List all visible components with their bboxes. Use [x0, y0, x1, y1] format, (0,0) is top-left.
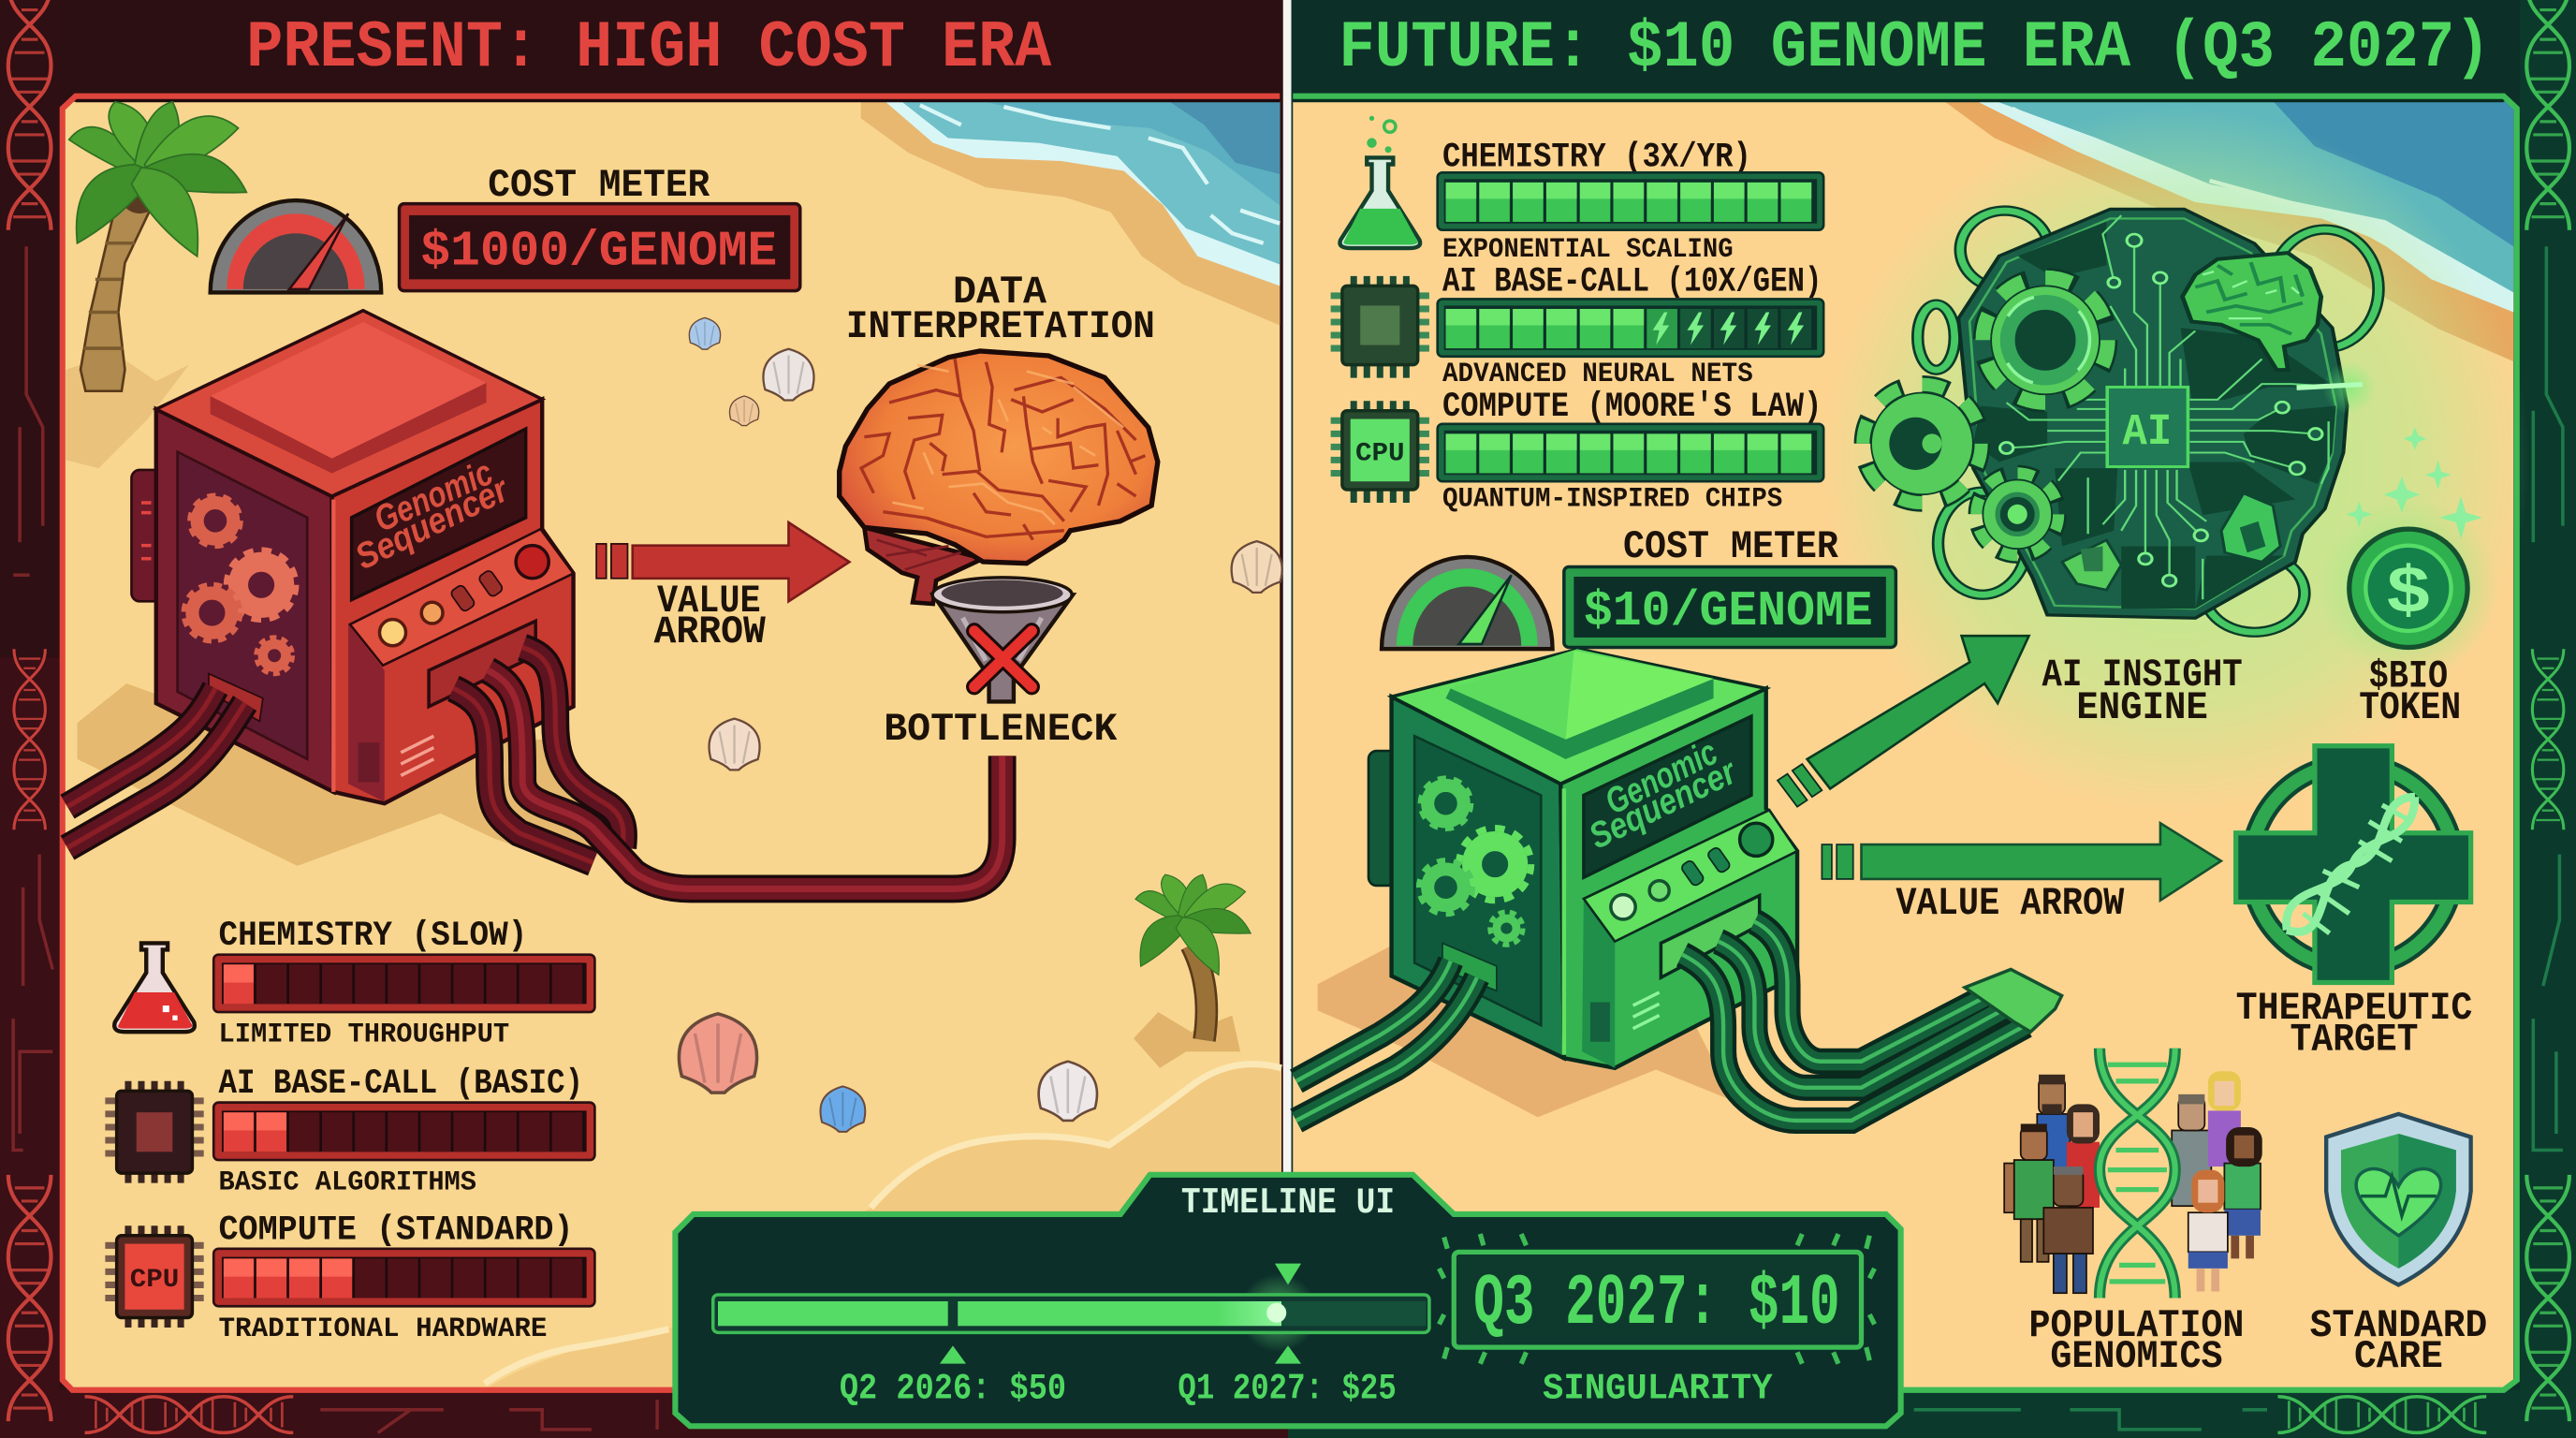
label: bottleneck: BOTTLENECK — [884, 707, 1118, 752]
callout: 10 dollar per genome — [1564, 566, 1895, 647]
icon: palm tree small — [1134, 874, 1251, 1068]
label: quantum-inspired chips: QUANTUM-INSPIRED CHIPS — [1442, 483, 1782, 515]
label: value arrow present: VALUE — [657, 579, 761, 624]
label: population genomics: POPULATION — [2029, 1303, 2244, 1348]
label: ai insight engine — [2042, 653, 2243, 730]
label: standard care: CARE — [2354, 1334, 2443, 1379]
label: singularity: SINGULARITY — [1543, 1369, 1774, 1410]
label: cost meter present: COST METER — [488, 163, 710, 208]
icon: green gauge — [1382, 557, 1553, 649]
bar: compute standard, 4 of 11 — [213, 1249, 594, 1306]
label: value arrow present: ARROW — [654, 609, 767, 654]
icon: green cpu chip — [1331, 401, 1429, 503]
label: exponential scaling: EXPONENTIAL SCALING — [1442, 233, 1734, 265]
callout: 1000 dollar per genome — [400, 204, 800, 291]
label: data interpretation: DATA — [953, 270, 1047, 315]
bar: chemistry slow, 1 of 11 — [213, 955, 594, 1012]
shadow: red sequencer — [78, 683, 624, 871]
chart: timeline progress track — [713, 1273, 1429, 1352]
icon: timeline markers — [940, 1264, 1301, 1364]
icon: brain — [840, 351, 1158, 604]
label: population genomics: GENOMICS — [2050, 1334, 2223, 1379]
icon: population genomics people and DNA — [2004, 1049, 2262, 1298]
icon: green flask with bubbles — [1339, 116, 1420, 248]
panel: timeline UI — [675, 1175, 1901, 1426]
callout: 10 dollar per genome: $10/GENOME — [1584, 583, 1873, 639]
label: compute moore's law: COMPUTE (MOORE'S LAW) — [1442, 388, 1822, 427]
label: therapeutic target — [2236, 986, 2472, 1062]
label: therapeutic target: TARGET — [2291, 1017, 2418, 1062]
icon: green genomic sequencer — [1368, 649, 1797, 1068]
bar: compute full — [1438, 424, 1823, 481]
panel: future beach scene — [1293, 102, 2530, 1390]
label: ai insight engine: AI INSIGHT — [2042, 653, 2243, 697]
icon: bottleneck funnel with red X — [932, 578, 1073, 701]
label: chemistry 3x: CHEMISTRY (3X/YR) — [1442, 138, 1751, 177]
icon: red flask — [114, 943, 195, 1032]
label: value arrow present — [654, 579, 767, 654]
shadow: green sequencer — [1318, 946, 1734, 1117]
label: compute standard: COMPUTE (STANDARD) — [218, 1211, 574, 1250]
panel: future progress bars — [1331, 116, 1823, 515]
callout: 1000 dollar per genome: $1000/GENOME — [420, 224, 777, 280]
icon: palm tree large — [66, 102, 246, 468]
label: traditional hardware: TRADITIONAL HARDWARE — [218, 1313, 547, 1344]
label: ai insight engine: ENGINE — [2076, 685, 2208, 730]
label: value arrow future: VALUE ARROW — [1895, 881, 2125, 926]
arrow: value arrow future — [1822, 823, 2221, 901]
label: data interpretation: INTERPRETATION — [846, 304, 1155, 349]
divider — [1283, 0, 1292, 1177]
label: q2 2026: Q2 2026: $50 — [840, 1369, 1066, 1410]
label: therapeutic target: THERAPEUTIC — [2236, 986, 2472, 1031]
icon: AI insight engine: AI — [2123, 408, 2172, 458]
label: population genomics — [2029, 1303, 2244, 1379]
icon: red cpu chip — [105, 1225, 204, 1328]
icon: sparkles — [2346, 427, 2482, 539]
icon: red genomic sequencer: Sequencer — [349, 469, 516, 578]
label: standard care — [2310, 1303, 2487, 1379]
icon: green cpu chip: CPU — [1355, 439, 1405, 468]
panel: left border decoration — [8, 0, 657, 1432]
label: standard care: STANDARD — [2310, 1303, 2487, 1348]
label: bio token: TOKEN — [2359, 685, 2461, 730]
icon: red cpu chip: CPU — [130, 1266, 179, 1295]
label: advanced neural nets: ADVANCED NEURAL NETS — [1442, 358, 1753, 389]
icon: AI insight engine — [1863, 209, 2378, 632]
arrow: diagonal arrow to AI engine — [1778, 636, 2029, 807]
bar: ai base-call with bolts — [1438, 299, 1823, 357]
label: ai base-call 10x: AI BASE-CALL (10X/GEN) — [1442, 263, 1822, 302]
icon: standard care shield — [2326, 1114, 2471, 1284]
label: ai base-call basic: AI BASE-CALL (BASIC) — [218, 1064, 583, 1104]
icon: BIO token coin — [2318, 498, 2498, 679]
label: limited throughput: LIMITED THROUGHPUT — [218, 1019, 509, 1050]
label: bio token: $BIO — [2369, 654, 2448, 699]
arrow: cables from red sequencer — [67, 647, 1003, 888]
icon: green cable connector — [1965, 969, 2062, 1032]
arrow: value arrow present — [596, 522, 849, 601]
label: timeline ui: TIMELINE UI — [1181, 1182, 1395, 1224]
label: bio token — [2359, 654, 2461, 730]
icon: red genomic sequencer — [131, 311, 574, 803]
icon: basic chip — [105, 1081, 204, 1183]
label: cost meter future: COST METER — [1623, 524, 1839, 569]
title: present: PRESENT: HIGH COST ERA — [246, 12, 1052, 86]
icon: green chip — [1331, 276, 1429, 378]
label: basic algorithms: BASIC ALGORITHMS — [218, 1167, 476, 1198]
icon: therapeutic target cross — [2236, 746, 2471, 983]
label: data interpretation — [846, 270, 1155, 349]
bar: ai base-call basic, 2 of 11 — [213, 1103, 594, 1160]
label: chemistry slow: CHEMISTRY (SLOW) — [218, 917, 527, 956]
icon: red genomic sequencer: Genomic — [368, 452, 499, 540]
icon: BIO token coin: $ — [2385, 558, 2431, 632]
icons: seashells — [679, 317, 1282, 1132]
panel: right border decoration — [1914, 0, 2569, 1432]
label: q1 2027: Q1 2027: $25 — [1178, 1369, 1397, 1410]
arrow: cables from green sequencer — [1296, 922, 2026, 1121]
callout: Q3 2027 singularity box: Q3 2027: $10 — [1473, 1264, 1840, 1345]
icon: red gauge — [211, 200, 381, 292]
panel: present progress bars — [105, 917, 594, 1344]
icon: green genomic sequencer: Genomic — [1599, 732, 1724, 823]
icon: green genomic sequencer: Sequencer — [1583, 751, 1744, 857]
callout: Q3 2027 singularity box — [1439, 1234, 1875, 1364]
panel: present beach scene — [63, 102, 1281, 1390]
bar: chemistry full — [1438, 172, 1823, 230]
title: future: FUTURE: $10 GENOME ERA (Q3 2027) — [1339, 12, 2491, 86]
